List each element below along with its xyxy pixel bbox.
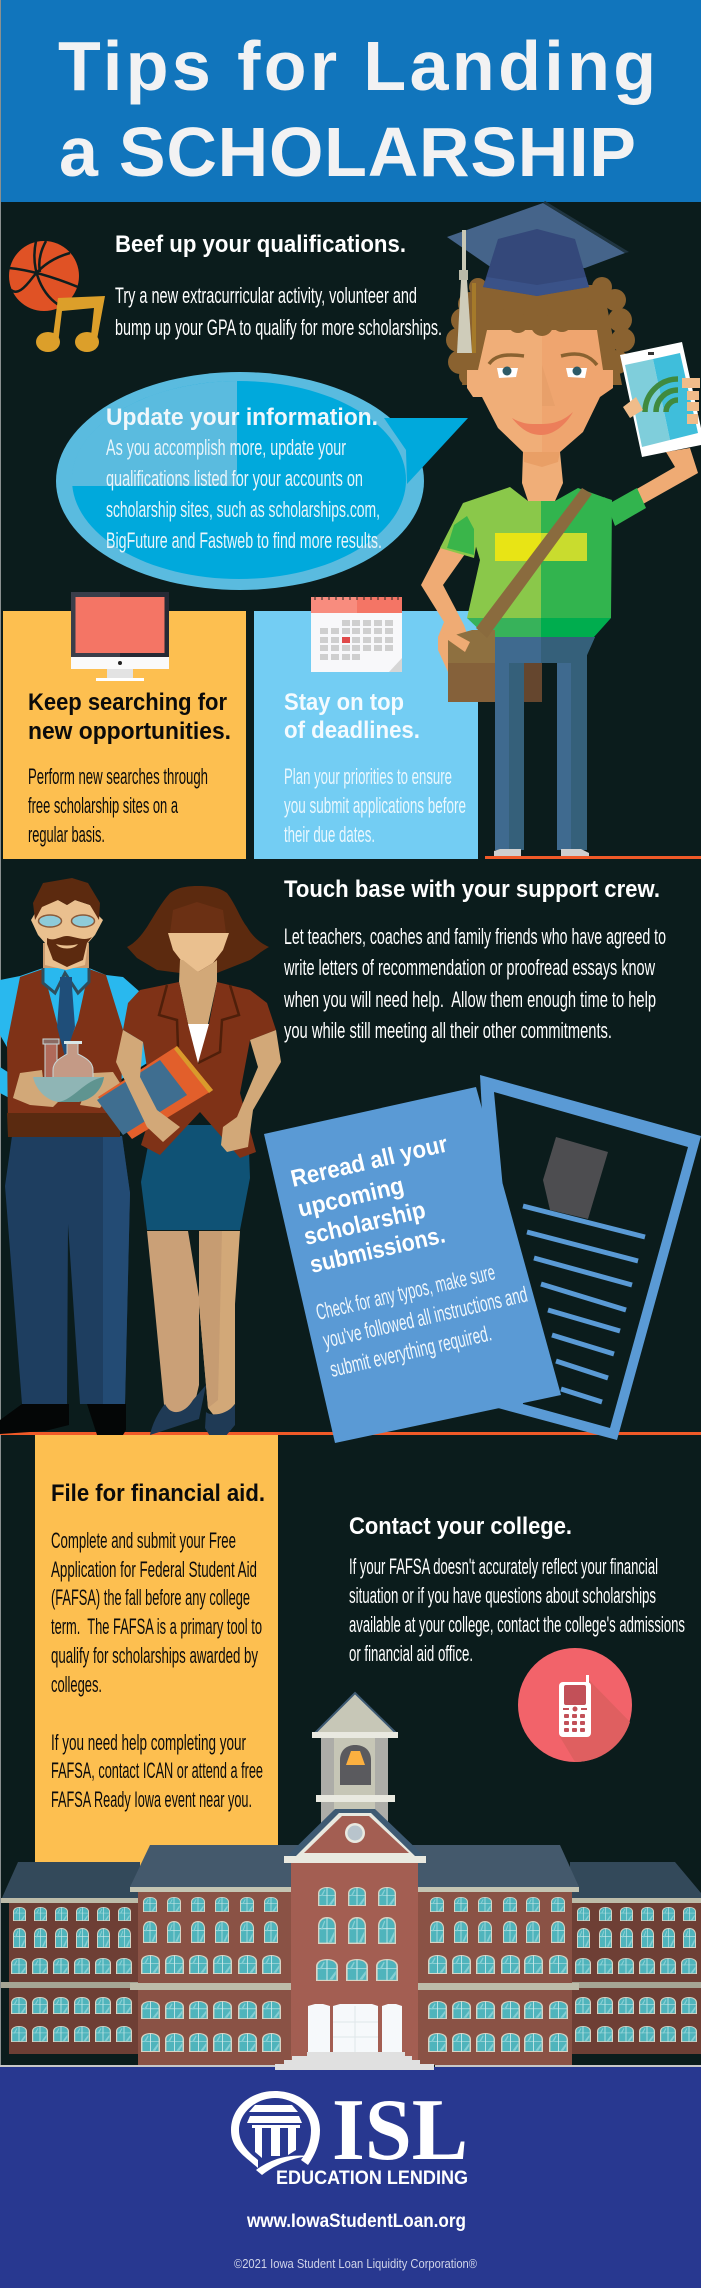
logo tagline: EDUCATION LENDING bbox=[276, 2168, 468, 2189]
fingers bbox=[623, 378, 700, 424]
body: you've followed all instructions and bbox=[321, 1281, 530, 1353]
building: college hall bbox=[1, 1693, 701, 2070]
neck bbox=[43, 943, 89, 968]
skirt bbox=[141, 1125, 250, 1230]
shirt bbox=[463, 487, 541, 618]
left arm bbox=[421, 518, 482, 672]
tower roof bbox=[315, 1693, 396, 1733]
tie bbox=[57, 977, 75, 1057]
books bbox=[98, 1046, 213, 1139]
title line 2: a SCHOLARSHIP bbox=[59, 113, 636, 191]
glasses bbox=[38, 915, 94, 927]
figure: male teacher with flask bbox=[0, 878, 152, 1450]
text block: contact your college: or financial aid office. bbox=[349, 1641, 473, 1666]
hair bbox=[127, 886, 269, 973]
body: Check for any typos, make sure bbox=[314, 1259, 497, 1325]
body bbox=[106, 435, 382, 553]
icon: music note bbox=[36, 296, 105, 352]
side wings bbox=[9, 1900, 138, 2054]
heading: File for financial aid. bbox=[51, 1480, 265, 1507]
icon: basketball bbox=[9, 241, 79, 311]
hair bbox=[33, 878, 100, 920]
heading: upcoming bbox=[295, 1172, 407, 1223]
body: qualifications listed for your accounts on bbox=[106, 466, 363, 491]
neck bbox=[179, 960, 217, 1024]
body: scholarship sites, such as scholarships.com, bbox=[106, 497, 380, 522]
card: reread all your submissions bbox=[264, 1087, 561, 1443]
body: As you accomplish more, update your bbox=[106, 435, 346, 460]
shirt bbox=[0, 968, 152, 1080]
divider line lower bbox=[0, 1432, 701, 1435]
nose bbox=[542, 365, 555, 406]
text block: beef up your qualifications bbox=[115, 231, 442, 340]
gable bbox=[286, 1809, 425, 1857]
left forearm bbox=[0, 1067, 20, 1100]
vest bbox=[7, 969, 123, 1133]
panel: keep searching bbox=[3, 611, 246, 859]
body: Application for Federal Student Aid bbox=[51, 1557, 257, 1582]
title line 1: Tips for Landing bbox=[58, 27, 656, 105]
body: If you need help completing your bbox=[51, 1730, 246, 1755]
entrance steps bbox=[275, 2052, 434, 2070]
icon: cell phone bbox=[518, 1648, 632, 1762]
panel: stay on top of deadlines: their due dates. bbox=[284, 822, 375, 847]
footer bbox=[0, 2065, 701, 2288]
panel: keep searching: regular basis. bbox=[28, 822, 105, 847]
head bbox=[31, 900, 103, 970]
bell niche bbox=[340, 1745, 371, 1785]
title banner bbox=[1, 0, 701, 202]
center block bbox=[291, 1857, 418, 2065]
left sleeve bbox=[440, 503, 479, 558]
panel: stay on top of deadlines: of deadlines. bbox=[284, 717, 420, 744]
heading: Beef up your qualifications. bbox=[115, 231, 406, 258]
panel: stay on top of deadlines bbox=[254, 611, 478, 859]
right sleeve bbox=[604, 488, 646, 526]
graduation cap bbox=[447, 203, 625, 268]
neck bbox=[522, 452, 563, 501]
body: submit everything required. bbox=[328, 1320, 494, 1382]
windows: left side wing bbox=[11, 1907, 132, 2042]
heading: Touch base with your support crew. bbox=[284, 876, 660, 903]
shirt badge bbox=[495, 533, 541, 561]
shoes bbox=[0, 1404, 69, 1434]
tower body bbox=[321, 1738, 388, 1828]
windows: right side wing bbox=[575, 1907, 697, 2042]
text block: touch base with support crew bbox=[283, 876, 666, 1043]
website: www.IowaStudentLoan.org bbox=[246, 2211, 466, 2232]
bowl bbox=[33, 1077, 104, 1102]
body: Complete and submit your Free bbox=[51, 1528, 236, 1553]
jacket bbox=[123, 982, 276, 1158]
fringe bbox=[170, 902, 226, 933]
speech bubble: update your information bbox=[56, 372, 468, 590]
satchel bbox=[448, 630, 495, 663]
panel: keep searching: free scholarship sites on a bbox=[28, 793, 178, 818]
main roof bbox=[130, 1845, 579, 1887]
body: FAFSA, contact ICAN or attend a free bbox=[51, 1758, 263, 1783]
shoes bbox=[150, 1385, 206, 1435]
face bbox=[467, 330, 542, 452]
entrance portico bbox=[308, 2004, 402, 2052]
document frame bbox=[480, 1075, 701, 1440]
body: Plan your priorities to ensure bbox=[284, 764, 452, 789]
hair fringe bbox=[480, 285, 598, 336]
tablet bbox=[620, 342, 701, 457]
eyes bbox=[497, 368, 518, 378]
mouth bbox=[512, 412, 573, 435]
collar bbox=[43, 968, 89, 993]
legs bbox=[147, 1231, 199, 1415]
bag back bbox=[495, 663, 542, 702]
body: (FAFSA) the fall before any college bbox=[51, 1585, 250, 1610]
text lines bbox=[523, 1206, 645, 1402]
body: colleges. bbox=[51, 1672, 102, 1697]
blouse bbox=[188, 1024, 209, 1063]
test tube bbox=[43, 1039, 59, 1079]
panel: keep searching: new opportunities. bbox=[28, 718, 231, 745]
photo placeholder bbox=[543, 1137, 608, 1219]
heading: Keep searching for bbox=[28, 689, 227, 716]
heading: submissions. bbox=[307, 1221, 448, 1279]
strap bbox=[476, 488, 592, 638]
pants bbox=[5, 1136, 130, 1404]
body: qualify for scholarships awarded by bbox=[51, 1643, 258, 1668]
hair bbox=[446, 277, 635, 385]
hand on strap bbox=[438, 630, 470, 652]
flask bbox=[53, 1041, 93, 1079]
windows: right main wing bbox=[428, 1897, 568, 2052]
panel: stay on top of deadlines: you submit applications before bbox=[284, 793, 466, 818]
panel: file for financial aid bbox=[35, 1435, 278, 1875]
body: FAFSA Ready Iowa event near you. bbox=[51, 1787, 252, 1812]
heading: Stay on top bbox=[284, 689, 404, 716]
divider line right bbox=[485, 856, 701, 859]
beard bbox=[47, 936, 92, 967]
pants bbox=[488, 637, 595, 850]
bell bbox=[346, 1751, 365, 1765]
heading bbox=[288, 1131, 450, 1279]
logo wordmark: ISL bbox=[332, 2082, 468, 2179]
wifi arcs bbox=[645, 379, 678, 412]
body: term. The FAFSA is a primary tool to bbox=[51, 1614, 262, 1639]
windows: center block bbox=[316, 1887, 398, 1981]
heading: Reread all your bbox=[288, 1131, 450, 1193]
arms bbox=[116, 1030, 180, 1142]
text block: beef up your qualifications: bump up your GPA to qualify for more scholarships. bbox=[115, 315, 442, 340]
figure: female teacher with books bbox=[97, 886, 281, 1443]
heading: scholarship bbox=[301, 1197, 428, 1251]
text block: contact your college bbox=[349, 1513, 685, 1666]
side roofs bbox=[1, 1862, 140, 1900]
body bbox=[51, 1528, 263, 1812]
logo emblem bbox=[231, 2091, 320, 2175]
icon: desktop monitor bbox=[71, 592, 169, 681]
heading: Update your information. bbox=[106, 404, 378, 431]
icon: calendar bbox=[311, 595, 402, 672]
right arm bbox=[635, 448, 698, 504]
heading: Contact your college. bbox=[349, 1513, 572, 1540]
eyebrows bbox=[489, 354, 597, 365]
lapels bbox=[159, 985, 239, 1063]
body: BigFuture and Fastweb to find more results. bbox=[106, 528, 382, 553]
face bbox=[168, 933, 229, 972]
hands bbox=[13, 1070, 58, 1107]
body: Try a new extracurricular activity, volunteer and bbox=[115, 283, 417, 308]
tassel bbox=[457, 230, 476, 353]
body: Perform new searches through bbox=[28, 764, 208, 789]
body bbox=[314, 1259, 530, 1382]
windows: left main wing bbox=[141, 1897, 281, 2052]
main wings bbox=[138, 1892, 292, 2065]
shoes bbox=[494, 849, 521, 856]
copyright: ©2021 Iowa Student Loan Liquidity Corporation® bbox=[234, 2257, 478, 2271]
figure: student with cap and tablet bbox=[421, 201, 701, 856]
